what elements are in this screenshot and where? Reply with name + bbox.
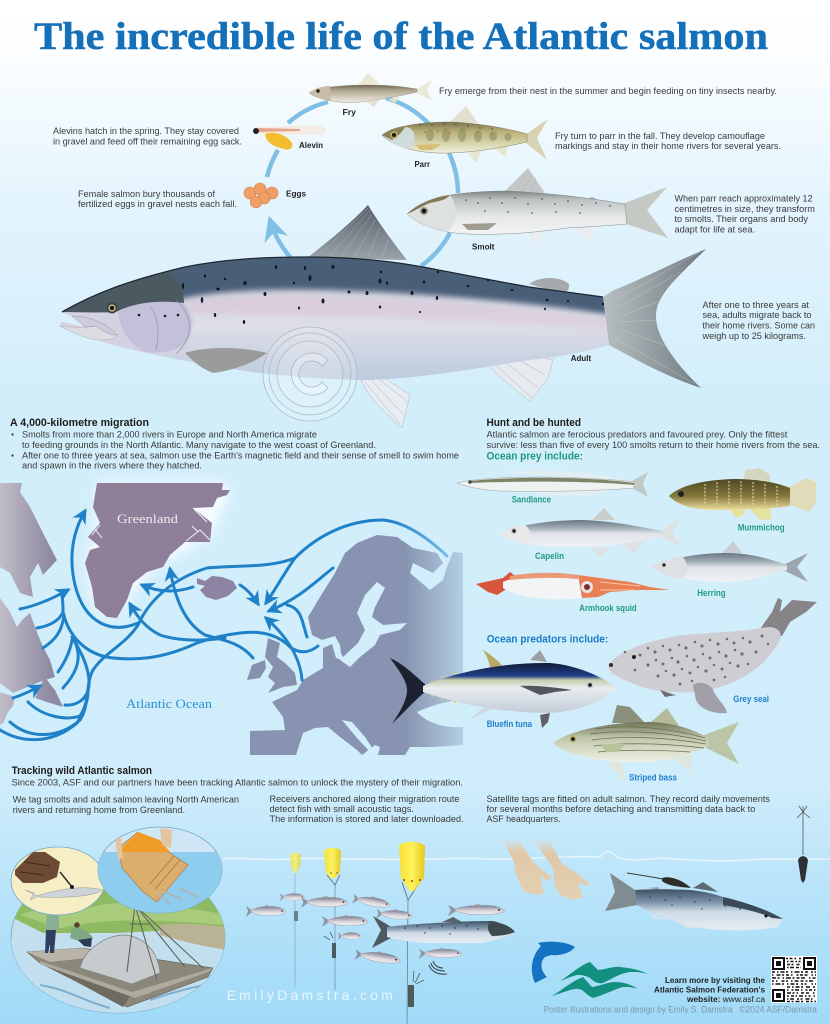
water surface line (222, 852, 830, 861)
text: receivers: detect fish with small acoustic tags. (270, 803, 414, 814)
label: parr: Parr (414, 159, 431, 169)
stage: parr (382, 106, 548, 163)
inset: releasing smolts from bucket (98, 826, 222, 914)
heading: ocean prey: Ocean prey include: (486, 450, 583, 462)
text: smolt: When parr reach approximately 12 (674, 192, 812, 204)
text: tagging: rivers and returning home from Greenland. (13, 804, 185, 815)
text: learn more: Learn more by visiting the (665, 975, 765, 985)
credit line: ©2024 ASF/Damstra (740, 1004, 818, 1014)
text: satellite tags (486, 793, 770, 824)
text: alevin: in gravel and feed off their remaining egg sack. (53, 136, 242, 146)
text: satellite tags: for several months before detaching and transmitting data back to (486, 803, 755, 814)
prey: armhook squid (476, 572, 670, 599)
trap frame (127, 905, 203, 980)
title: The incredible life of the Atlantic salmon (34, 15, 768, 58)
text: hunt (486, 428, 820, 450)
adult lateral sheen (192, 300, 606, 328)
map label: Atlantic Ocean: Atlantic Ocean (126, 696, 213, 711)
hands releasing salmon (502, 838, 590, 900)
smolt school (246, 893, 505, 966)
prey: mummichog (669, 468, 816, 520)
text: receivers (270, 793, 464, 824)
prey: capelin (499, 508, 682, 558)
text: alevin (53, 125, 242, 146)
text: migration bullets: After one to three years at sea, salmon use the Earth's magnetic field and their sense of smell to swim home (22, 450, 459, 460)
map: migration routes (0, 511, 447, 740)
satellite tag float at surface (797, 806, 810, 883)
text: adult: weigh up to 25 kilograms. (702, 330, 806, 341)
text: eggs: fertilized eggs in gravel nests each fall. (78, 198, 237, 209)
text: parr (555, 130, 781, 151)
inset: tagging a smolt (11, 847, 105, 915)
predator: bluefin tuna (390, 650, 615, 728)
stage: fry (309, 73, 432, 107)
adult adipose fin (529, 278, 569, 293)
satellite tagged salmon (605, 873, 783, 930)
adult tail fin (603, 249, 706, 388)
adult back outline (62, 257, 603, 312)
adult eye (106, 302, 118, 314)
map: Europe (250, 535, 463, 755)
text: smolt (674, 192, 815, 234)
text: hunt: survive: less than five of every 100 smolts return to their home rivers from the sea. (486, 439, 820, 450)
migration map (0, 483, 463, 755)
text: adult: sea, adults migrate back to (702, 309, 812, 320)
predator: striped bass (553, 705, 739, 782)
person crouching (70, 922, 93, 947)
label: bluefin tuna: Bluefin tuna (487, 719, 532, 729)
map: Britain and Ireland (247, 638, 297, 693)
text: adult: their home rivers. Some can (702, 320, 815, 330)
label: adult: Adult (571, 353, 591, 363)
label: striped bass: Striped bass (629, 772, 677, 782)
satellite tag on fish (627, 873, 691, 888)
trap raft (27, 948, 213, 1007)
trap net (80, 935, 160, 984)
prey: herring (650, 541, 808, 582)
QR code (771, 956, 817, 1003)
map: North America (0, 483, 63, 725)
river bank rocks (160, 924, 228, 950)
stage: alevin (253, 125, 327, 150)
tagged adult salmon in water (372, 916, 515, 948)
text: learn more: Atlantic Salmon Federation's (654, 984, 765, 994)
heading: migration: A 4,000-kilometre migration (10, 417, 149, 429)
text: hunt: Atlantic salmon are ferocious predators and favoured prey. Only the fittest (486, 428, 788, 440)
text: eggs (78, 188, 237, 209)
text: tracking intro: Since 2003, ASF and our partners have been tracking Atlantic salmon to unlock the mystery of their migration. (12, 776, 463, 788)
map: Greenland glow (87, 483, 230, 620)
text: tagging: We tag smolts and adult salmon leaving North American (13, 794, 239, 804)
text: adult (702, 299, 815, 341)
river water (10, 936, 228, 1015)
label: mummichog: Mummichog (738, 522, 785, 532)
text: smolt: to smolts. Their organs and body (674, 213, 808, 224)
text: smolt: centimetres in size, they transform (674, 203, 815, 214)
life cycle ring with arrow (267, 98, 458, 266)
text: satellite tags: Satellite tags are fitted on adult salmon. They record daily movements (486, 793, 770, 804)
heading: tracking: Tracking wild Atlantic salmon (12, 765, 152, 777)
river bank foliage (14, 889, 225, 944)
text: migration bullets: Smolts from more than 2,000 rivers in Europe and North America migrate (22, 428, 317, 440)
logo: blue salmon (532, 942, 575, 983)
text: parr: Fry turn to parr in the fall. They develop camouflage (555, 130, 765, 141)
text: eggs: Female salmon bury thousands of (78, 188, 215, 199)
heading: ocean predators: Ocean predators include: (487, 634, 608, 646)
map: Iceland (197, 576, 237, 600)
prey: sandlance (457, 471, 648, 497)
text: migration bullets (11, 428, 459, 470)
adult body (60, 257, 609, 380)
copyright watermark (263, 327, 357, 421)
text: learn more (654, 975, 765, 1004)
adult back shading (64, 258, 606, 318)
person standing (45, 902, 61, 953)
text: migration bullets: and spawn in the rivers where they hatched. (22, 460, 202, 470)
text: receivers: Receivers anchored along their migration route (270, 793, 460, 804)
label: grey seal: Grey seal (733, 694, 769, 704)
acoustic signal waves (429, 961, 447, 974)
label: fry: Fry (342, 107, 356, 117)
map: Black Sea, Adriatic and lakes (342, 700, 463, 752)
adult head (60, 302, 195, 336)
label: armhook squid: Armhook squid (579, 603, 637, 613)
map: Greenland fjords (92, 508, 210, 541)
text: alevin: Alevins hatch in the spring. They stay covered (53, 125, 239, 136)
text: tagging (13, 794, 239, 815)
text: smolt: adapt for life at sea. (674, 224, 755, 234)
map: Baltic Sea (337, 582, 407, 667)
credit line: Poster illustrations and design by Emily S. Damstra (544, 1004, 733, 1014)
label: eggs: Eggs (286, 188, 306, 198)
adult spots (138, 265, 604, 324)
label: alevin: Alevin (299, 140, 323, 150)
text: satellite tags: ASF headquarters. (486, 813, 561, 824)
label: sandlance: Sandlance (512, 494, 551, 504)
acoustic receiver moorings (290, 842, 425, 1024)
map label: Greenland: Greenland (117, 511, 179, 526)
adult pectoral fin (185, 348, 267, 373)
text: learn more: website: www.asf.ca (686, 994, 765, 1004)
heading: hunt: Hunt and be hunted (486, 417, 581, 429)
map: Greenland (85, 483, 230, 618)
adult dorsal fin (307, 205, 407, 260)
text: receivers: The information is stored and later downloaded. (270, 813, 464, 824)
stage: smolt (407, 168, 668, 247)
scene: river smolt trap (10, 889, 226, 1014)
label: smolt: Smolt (472, 242, 495, 252)
text: migration bullets: to feeding grounds in the North Atlantic. Many navigate to the west coast of Greenland. (22, 439, 376, 450)
stage: eggs (244, 183, 278, 208)
text: adult: After one to three years at (702, 299, 809, 310)
text: parr: markings and stay in their home rivers for several years. (555, 140, 781, 151)
adult mouth (60, 316, 118, 340)
text: fry: Fry emerge from their nest in the summer and begin feeding on tiny insects nearby. (439, 85, 777, 96)
label: capelin: Capelin (535, 551, 564, 561)
watermark: website: EmilyDamstra.com (227, 987, 393, 1003)
stage: adult salmon (50, 205, 706, 428)
adult lower fins (361, 348, 556, 428)
logo: green waves (552, 962, 648, 998)
predator: grey seal (608, 598, 817, 713)
label: herring: Herring (697, 588, 726, 598)
